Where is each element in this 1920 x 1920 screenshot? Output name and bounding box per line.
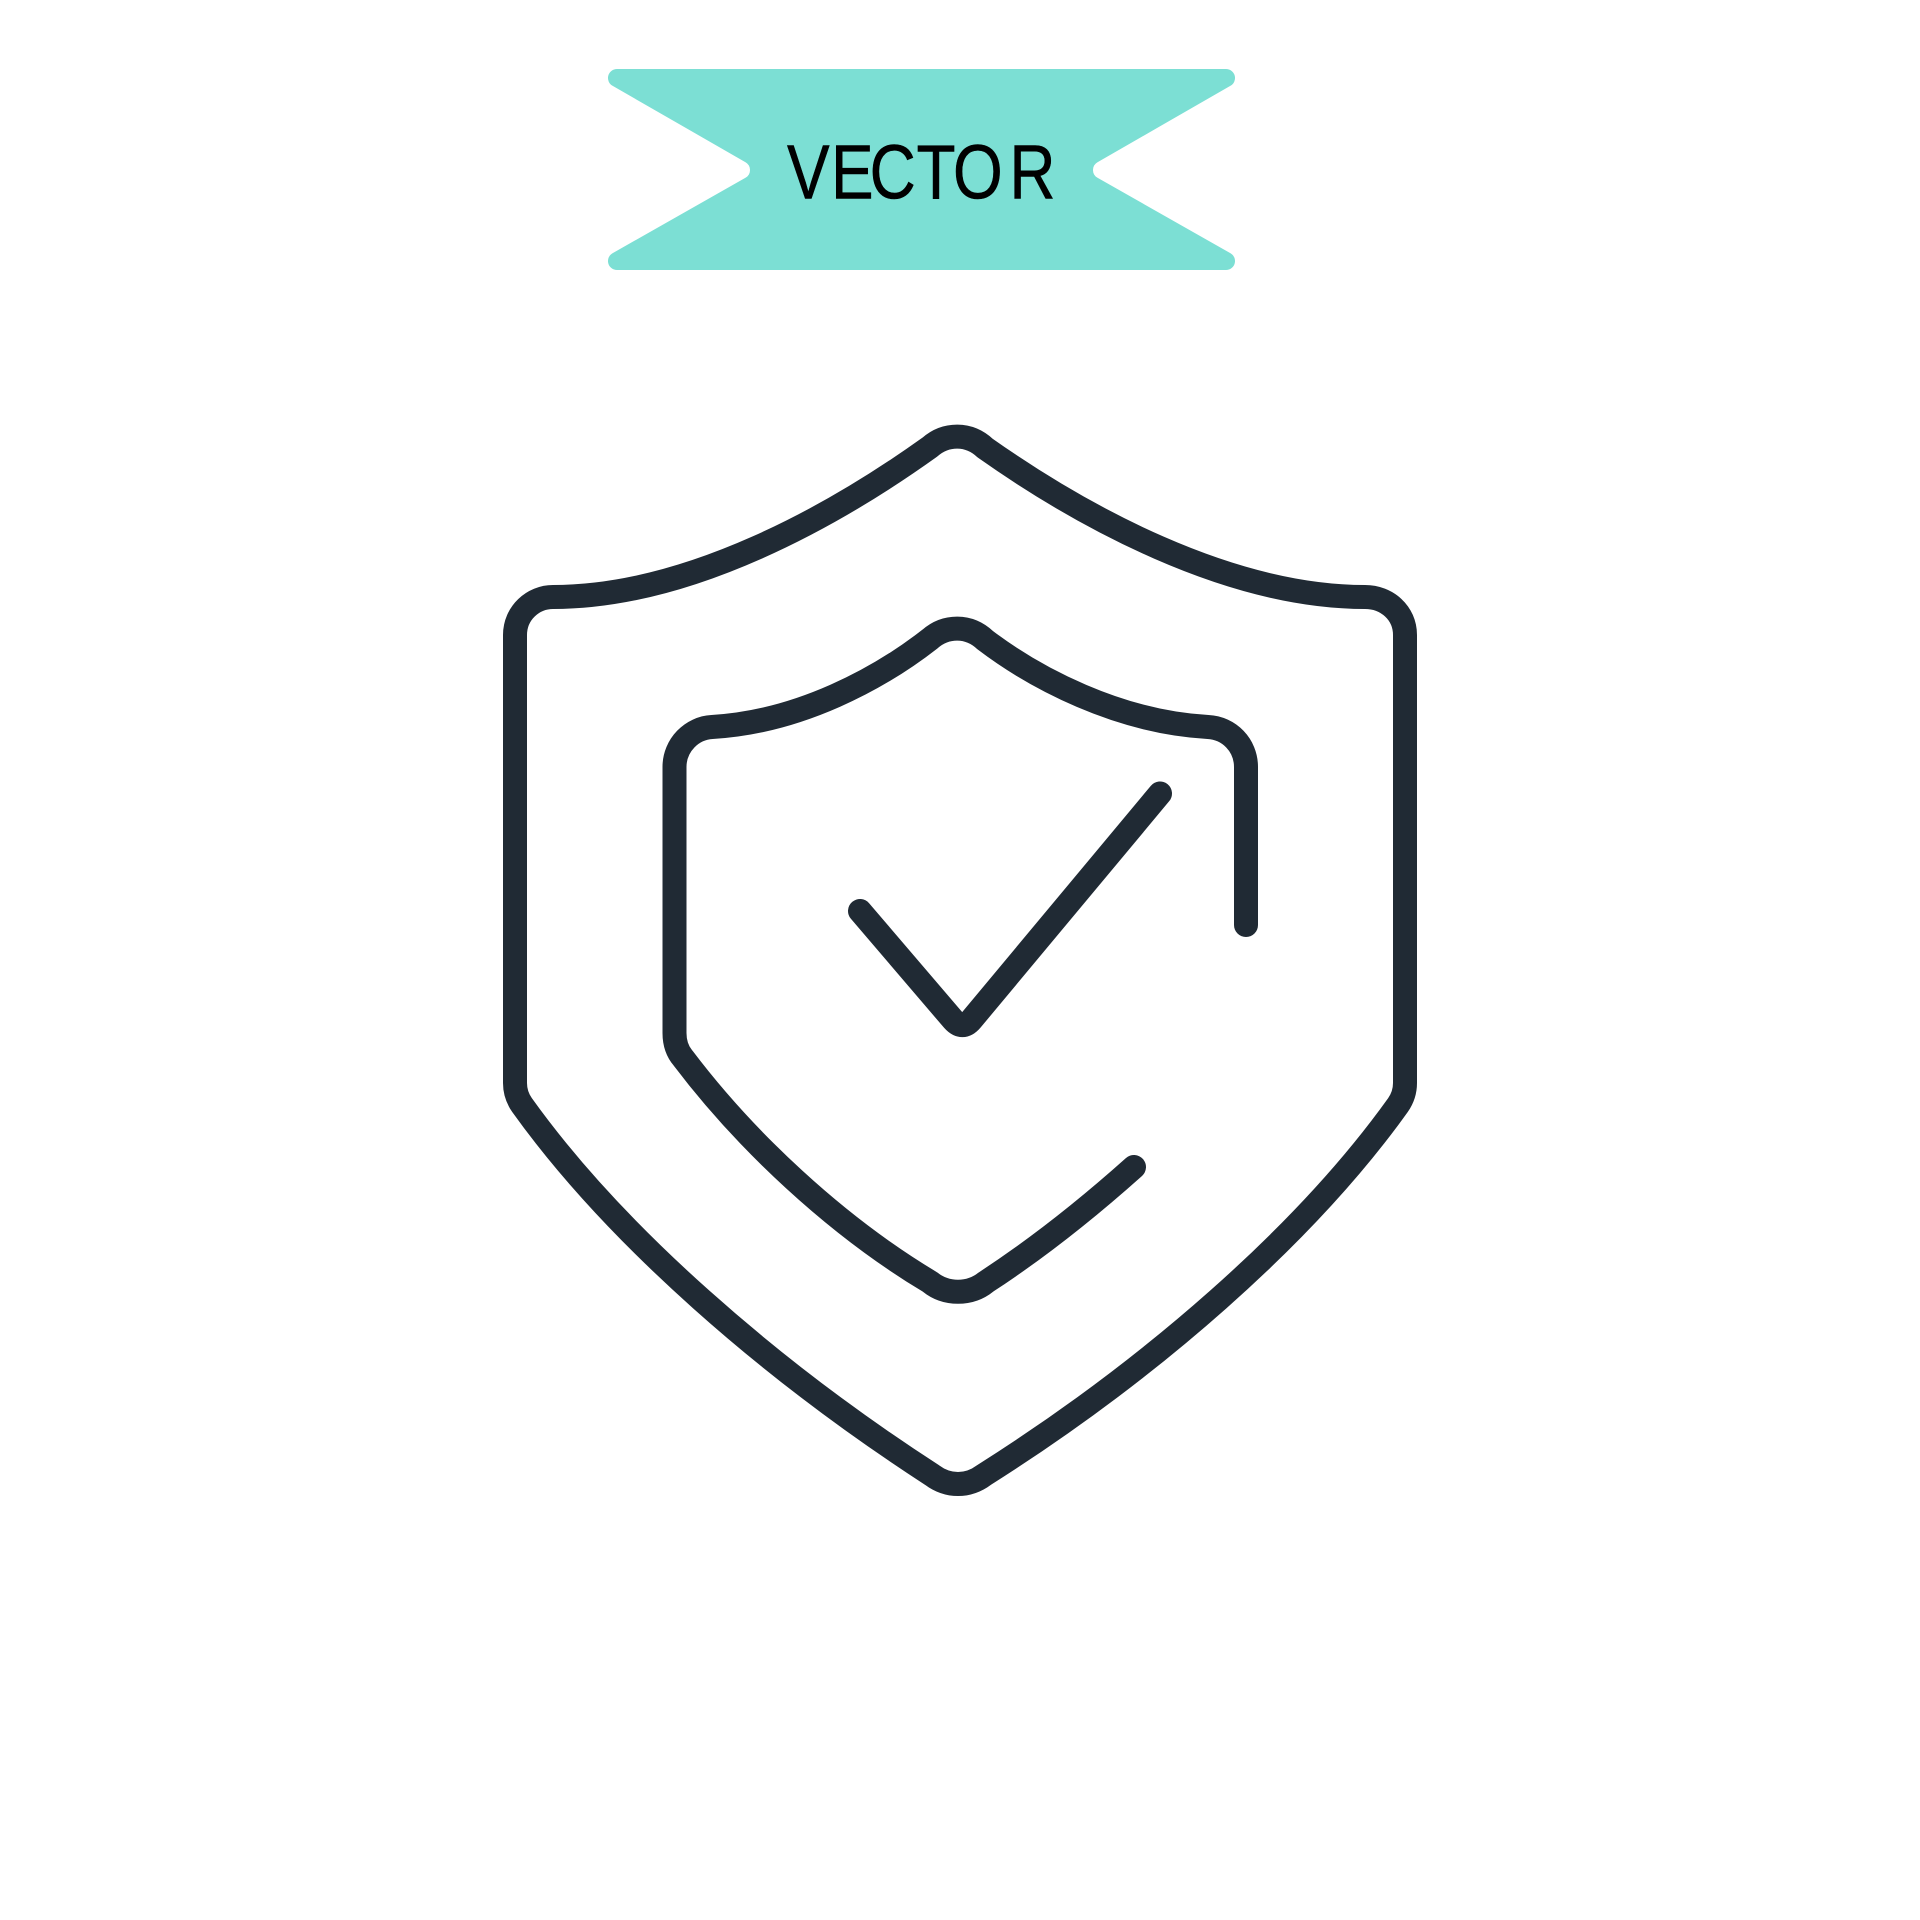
- ribbon shape: [608, 69, 1235, 270]
- outer shield outline: [515, 437, 1405, 1484]
- ribbon label: VECTOR: [787, 129, 1056, 215]
- check mark: [860, 794, 1160, 1025]
- banner: VECTOR ribbon: [608, 69, 1235, 270]
- icon: shield with check mark: [515, 437, 1405, 1484]
- inner shield open outline: [674, 629, 1246, 1292]
